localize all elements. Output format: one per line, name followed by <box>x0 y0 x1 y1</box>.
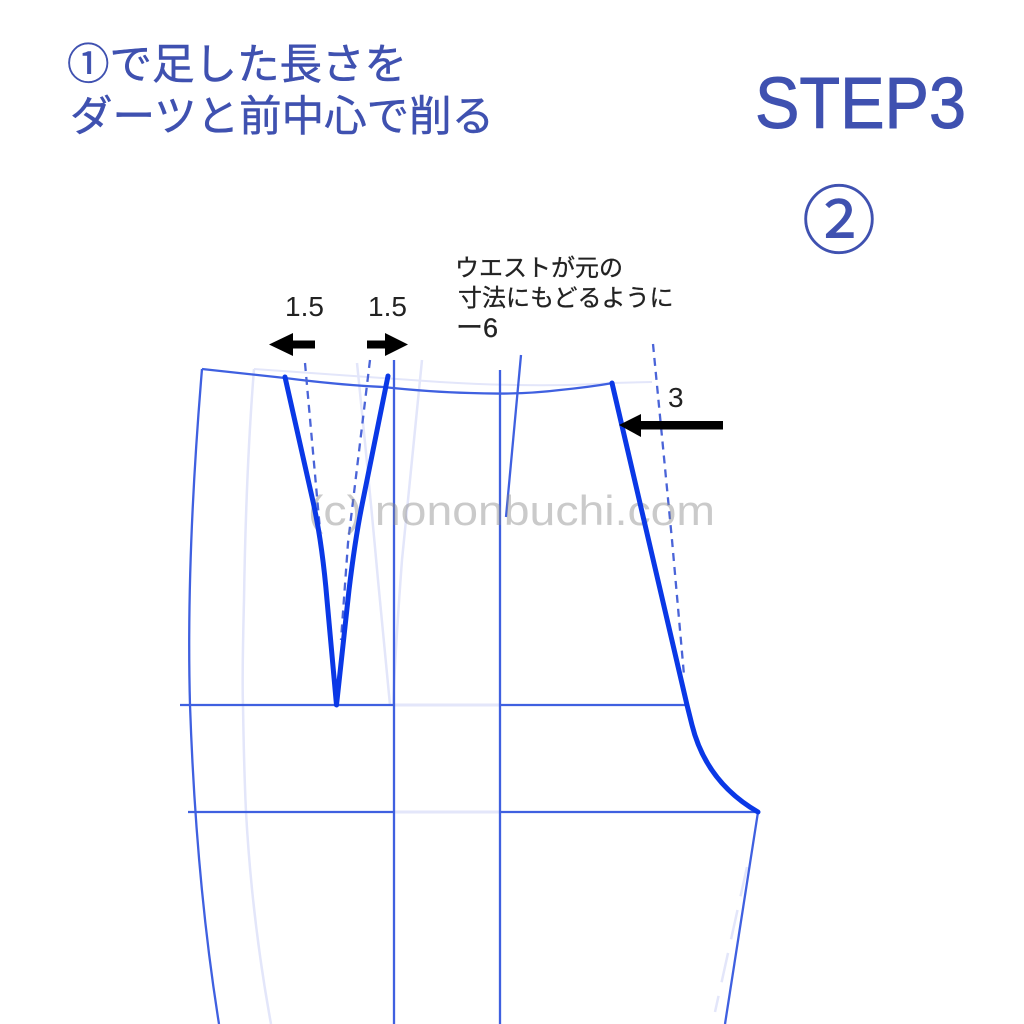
note: waist returns to original size: 寸法にもどるように <box>458 285 674 312</box>
title <box>67 42 494 141</box>
pale original pattern lines <box>243 360 747 1024</box>
note: waist returns to original size: ー6 <box>456 313 498 343</box>
note: waist returns to original size: ウエストが元の <box>455 255 623 282</box>
watermark: (c) nononbuchi.com <box>308 487 715 534</box>
step number: ② <box>802 180 876 263</box>
thick front center curve <box>612 383 758 812</box>
title: ①で足した長さを <box>67 42 407 89</box>
label: 1.5 left: 1.5 <box>285 291 324 322</box>
thick dart <box>285 376 388 705</box>
pattern outline and guide lines <box>180 355 758 1024</box>
label: 1.5 right: 1.5 <box>368 291 407 322</box>
arrow: side reduction <box>619 414 723 437</box>
arrow: left <box>269 333 315 356</box>
label: 3: 3 <box>668 382 684 413</box>
dashed original dart and side lines <box>305 344 684 675</box>
title: ダーツと前中心で削る <box>70 94 494 141</box>
step heading: STEP3 <box>755 64 966 144</box>
arrow: right <box>367 333 408 356</box>
note: waist returns to original size <box>455 255 674 343</box>
